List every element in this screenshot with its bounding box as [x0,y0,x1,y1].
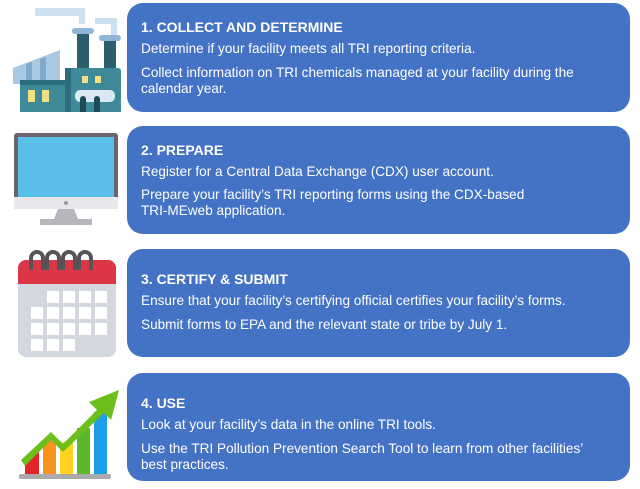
text 3b: Submit forms to EPA and the relevant state or tribe by July 1. [141,317,507,332]
heading 1: 1. COLLECT AND DETERMINE [141,19,343,35]
heading 3: 3. CERTIFY & SUBMIT [141,271,288,287]
text 2b [141,187,524,218]
text 4b: best practices. [141,457,229,472]
text 1: Determine if your facility meets all TRI reporting criteria. [141,41,475,56]
heading 4: 4. USE [141,395,185,411]
panel: collect and determine [127,3,630,112]
text 1b [141,65,574,96]
text 3: Ensure that your facility’s certifying official certifies your facility’s forms. [141,293,566,308]
text 2b: TRI-MEweb application. [141,203,285,218]
text 4b: Use the TRI Pollution Prevention Search Tool to learn from other facilities’ [141,441,583,456]
text 2: Register for a Central Data Exchange (CDX) user account. [141,164,494,179]
text 1b: Collect information on TRI chemicals managed at your facility during the [141,65,574,80]
panel: use [127,373,630,481]
icon: calendar [18,250,116,357]
text 2b: Prepare your facility’s TRI reporting forms using the CDX-based [141,187,524,202]
text 4b [141,441,583,472]
panel: certify and submit [127,249,630,357]
icon: growth chart [19,390,119,479]
panel: prepare [127,126,630,234]
text 4: Look at your facility’s data in the online TRI tools. [141,417,436,432]
text 1b: calendar year. [141,81,226,96]
icon: factory [13,8,121,112]
heading 2: 2. PREPARE [141,142,223,158]
icon: computer monitor [14,133,118,225]
